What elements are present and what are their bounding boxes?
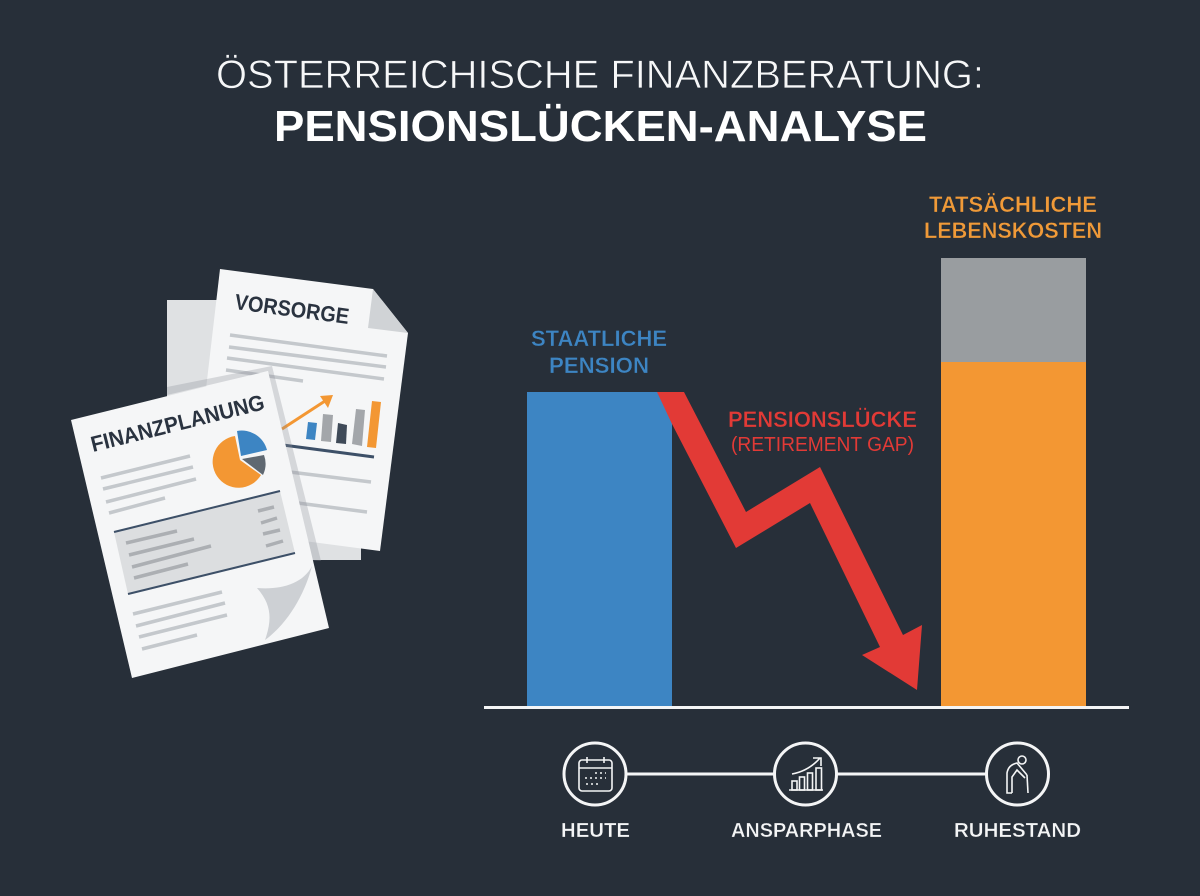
pie chart: [213, 431, 267, 488]
bar: actual living costs, gray: [941, 258, 1086, 362]
title: [216, 53, 984, 151]
label: Heute: HEUTE: [561, 820, 630, 842]
label: pension gap: [728, 407, 917, 456]
label: state pension: PENSION: [549, 353, 649, 378]
document: Vorsorge: [190, 269, 408, 551]
label: actual living costs: TATSÄCHLICHE: [929, 192, 1097, 217]
label: pension gap: (RETIREMENT GAP): [731, 434, 914, 456]
shadow of front page: [167, 366, 321, 561]
bar chart: [484, 258, 1129, 708]
lower text lines: [133, 592, 227, 649]
back blank sheet: [167, 300, 361, 560]
Finanzplanung heading: FINANZPLANUNG: [88, 390, 267, 457]
panel: document stack illustration: [71, 269, 408, 678]
bar: state pension: [527, 392, 672, 707]
title line 2: PENSIONSLÜCKEN-ANALYSE: [274, 102, 927, 151]
label: Ansparphase: ANSPARPHASE: [731, 820, 882, 842]
label: actual living costs: LEBENSKOSTEN: [924, 218, 1102, 243]
bar: actual living costs, orange: [941, 362, 1086, 707]
Vorsorge heading: VORSORGE: [233, 289, 351, 329]
timeline: [561, 743, 1081, 842]
shaded table: [114, 491, 295, 594]
title line 1: ÖSTERREICHISCHE FINANZBERATUNG:: [216, 53, 984, 97]
icon: growth chart: [774, 743, 836, 805]
icon: calendar: [564, 743, 626, 805]
text lines: [226, 335, 387, 512]
label: pension gap: PENSIONSLÜCKE: [728, 407, 917, 432]
mini bar chart: [282, 395, 381, 457]
icon: elderly person with cane: [986, 743, 1048, 805]
chart baseline: [484, 706, 1129, 709]
label: state pension: [531, 326, 667, 378]
upper text lines: [101, 456, 196, 513]
document: Finanzplanung: [71, 371, 329, 678]
label: state pension: STAATLICHE: [531, 326, 667, 351]
label: Ruhestand: RUHESTAND: [954, 820, 1081, 842]
arrow: pension gap: [657, 392, 922, 690]
page curl: [257, 566, 312, 640]
page fold: [368, 289, 408, 333]
timeline connector: [626, 772, 987, 776]
label: actual living costs: [924, 192, 1102, 243]
